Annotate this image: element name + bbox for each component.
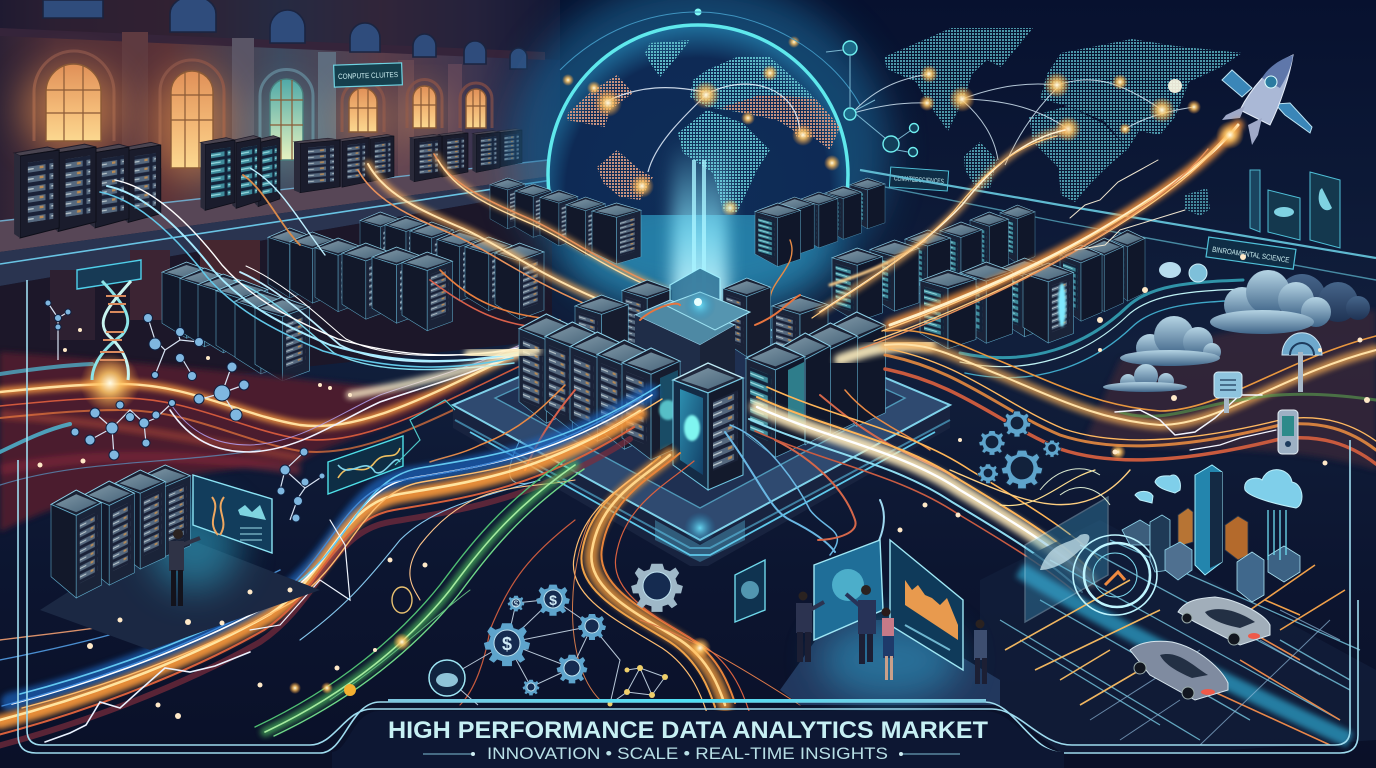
title: HIGH PERFORMANCE DATA ANALYTICS MARKET: [388, 717, 988, 744]
icon: rocket with satellite panels: [1222, 55, 1312, 145]
front hero rack: [673, 363, 743, 490]
ledge fascia: [0, 176, 552, 286]
light beam: [672, 140, 728, 310]
icons: molecules: [45, 300, 325, 522]
bar chart: [905, 580, 958, 640]
people: [796, 585, 987, 684]
window arch frames: [34, 51, 492, 168]
circuit trace: [395, 400, 455, 465]
panel screen on rack: [660, 370, 678, 450]
racks: [51, 465, 190, 598]
globe: [510, 0, 890, 325]
data screen: [1025, 497, 1108, 622]
analyst figure: [169, 529, 200, 606]
network hub icons: [826, 41, 918, 156]
streams: lower left bundle: [0, 385, 662, 748]
subtitle: INNOVATION • SCALE • REAL-TIME INSIGHTS: [487, 745, 888, 763]
scene: team at dashboards: [735, 540, 1000, 705]
icons: finance gear network: $: [549, 592, 557, 608]
icons: gears: [978, 411, 1061, 489]
label: climate science: [889, 167, 949, 191]
lens rings: [1073, 535, 1157, 615]
icon: dna helix: [92, 281, 131, 380]
icons: finance gear network: [429, 564, 683, 706]
large lit windows: [46, 64, 486, 168]
panel: hall architecture: [0, 0, 560, 400]
label: climate science: CLIMATEDSCIENCES: [894, 175, 944, 186]
server racks rear right rows: [755, 178, 1145, 349]
road grid: [980, 520, 1376, 752]
title frame: [18, 280, 1358, 753]
icon: wifi dish: [1282, 333, 1322, 392]
dna screen: [193, 475, 272, 553]
windows glow: [22, 65, 447, 180]
upper arched windows: [43, 0, 527, 69]
ledge floor: [0, 160, 552, 252]
icon: sensor board: [1214, 372, 1242, 413]
globe arcs: [605, 84, 800, 172]
city lines: [1040, 469, 1110, 505]
world map: [826, 28, 1242, 216]
streams: rocket trail: [812, 121, 1244, 349]
maroon data lanes: [0, 310, 1376, 532]
back wall rail right: [860, 170, 1376, 280]
panel: central platform: [453, 300, 950, 566]
rear data panels: [1250, 170, 1340, 248]
map arcs: [850, 74, 1194, 165]
card: dna chart: [328, 436, 403, 494]
scene: smart city: [980, 465, 1376, 752]
server racks rear left rows: [162, 178, 641, 381]
empty label plate: [77, 260, 141, 289]
car front: [1130, 641, 1228, 700]
icon: handheld device: [1278, 410, 1298, 454]
icons: finance gear network: $: [513, 599, 519, 609]
icons: clouds: [1103, 262, 1370, 392]
car rear right: [1178, 597, 1270, 645]
buildings: [1122, 465, 1300, 602]
holographic screens: [814, 540, 883, 640]
particle dots: [38, 254, 1370, 719]
central server cluster: [519, 268, 885, 490]
icons: finance gear network: $: [502, 634, 512, 654]
label: environmental science: BINROAMENTAL SCIENCE: [1212, 245, 1290, 265]
city clouds: [1135, 470, 1302, 508]
label: compute clusters: CONPUTE CLUITES: [338, 70, 398, 81]
subtitle: [423, 745, 960, 763]
cables from center: [430, 295, 955, 565]
card: gear: [735, 560, 765, 622]
map nodes: [919, 65, 1201, 142]
floor: [40, 530, 320, 650]
label: compute clusters: [334, 63, 402, 87]
window mullions: [46, 66, 486, 168]
label: environmental science: [1206, 237, 1296, 269]
lower hall wall: [0, 190, 552, 400]
server racks on upper ledge: [14, 129, 522, 238]
title plate: [332, 711, 1064, 768]
streams: center bottom: [460, 453, 800, 713]
streams: upper ledge to center: [100, 154, 925, 367]
streams: left lanes: [0, 266, 526, 485]
streams: right of center: [470, 280, 1376, 604]
scene: analyst with racks: [40, 465, 320, 650]
globe continents: [567, 40, 840, 213]
title glow band: [388, 699, 986, 702]
globe city nodes: [587, 65, 840, 217]
